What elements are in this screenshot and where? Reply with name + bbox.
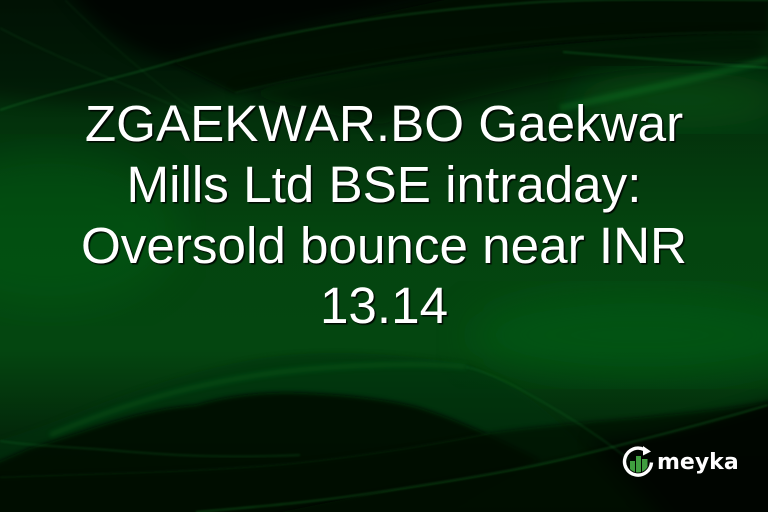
soft dark top area	[0, 0, 768, 104]
icon: circular arrow with green bars	[622, 446, 654, 477]
top light strands	[0, 0, 768, 110]
logo wordmark: meyka	[657, 450, 739, 475]
bottom light strands	[0, 441, 300, 456]
title: ZGAEKWAR.BO Gaekwar Mills Ltd BSE intraday: Oversold bounce near INR 13.14	[81, 95, 687, 334]
bottom hills	[0, 353, 660, 512]
logo: meyka	[622, 446, 739, 477]
right green glow	[570, 72, 768, 128]
